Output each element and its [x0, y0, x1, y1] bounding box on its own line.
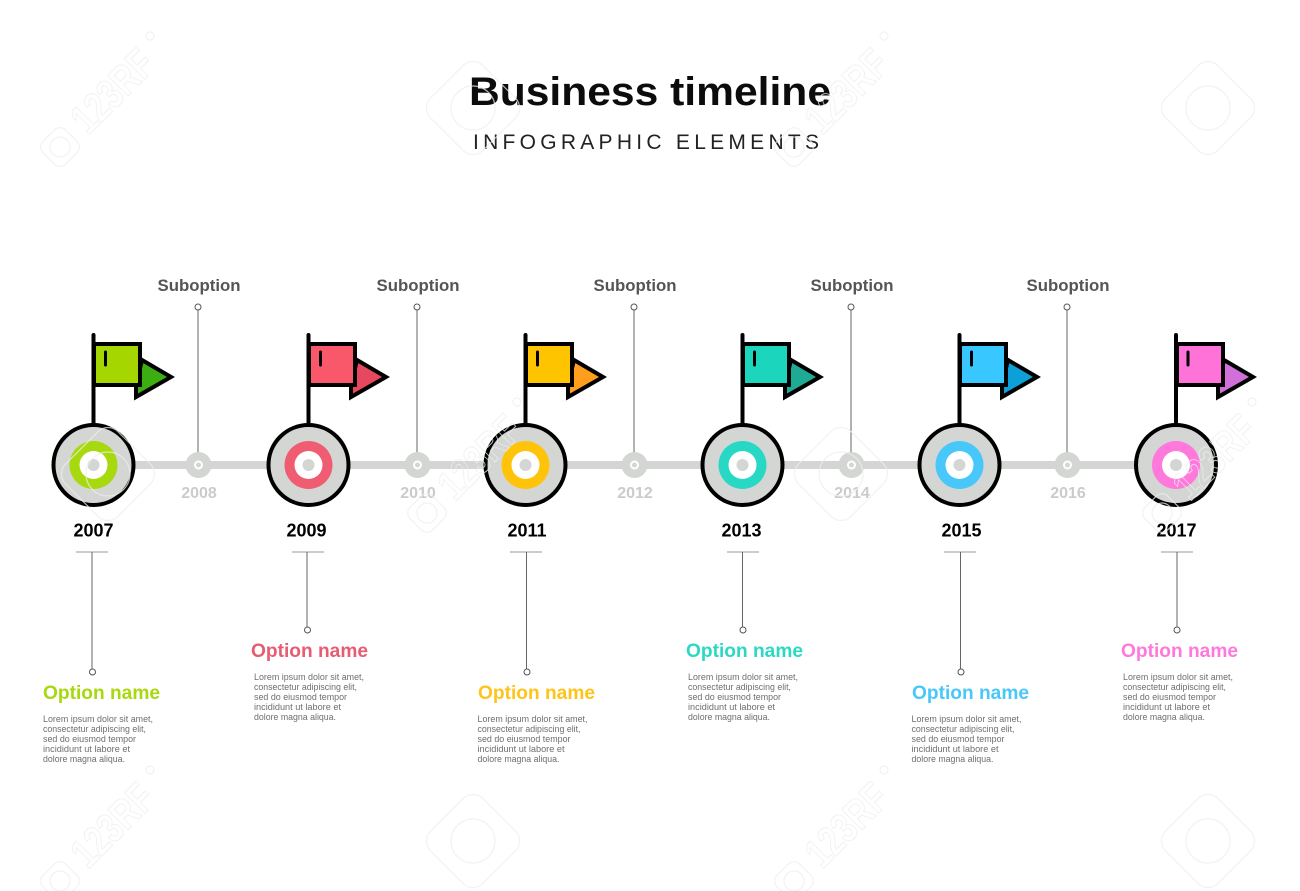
flag icon 2011: [526, 335, 603, 424]
watermark logo bottom left: [37, 766, 164, 891]
option text 2011: consectetur adipiscing elit,: [478, 724, 580, 734]
option text 2017: Option name: [1121, 641, 1238, 662]
suboption 2014: [810, 276, 894, 502]
option text 2013: consectetur adipiscing elit,: [688, 682, 791, 692]
year 2017: 2017: [1156, 520, 1197, 540]
option text 2007: [43, 683, 160, 764]
option text 2007: Option name: [43, 683, 160, 704]
flag icon 2015: [960, 335, 1037, 424]
option text 2009: Option name: [251, 641, 368, 662]
connector 2015: [944, 552, 976, 675]
milestone 2017: [1121, 335, 1253, 722]
option text 2009: Lorem ipsum dolor sit amet,: [254, 672, 364, 682]
suboption 2010: Suboption: [376, 276, 460, 295]
year 2011: 2011: [507, 520, 547, 540]
year 2013: 2013: [721, 520, 762, 540]
suboption 2008: [158, 276, 240, 502]
option text 2017: incididunt ut labore et: [1123, 702, 1211, 712]
suboption 2016: 2016: [1050, 485, 1086, 502]
timeline axis: [93, 461, 1176, 469]
target 2015: [920, 425, 1000, 505]
target 2009: [268, 425, 348, 505]
watermark logo middle centre: 123RF: [428, 406, 531, 508]
option text 2009: dolore magna aliqua.: [254, 712, 336, 722]
milestone 2009: [251, 335, 386, 722]
option text 2007: sed do eiusmod tempor: [43, 734, 136, 744]
watermark egg middle right-centre: [789, 422, 893, 526]
suboption 2010: [376, 276, 460, 502]
connector 2011: [510, 552, 542, 675]
option text 2011: [478, 683, 595, 764]
suboption 2012: [594, 276, 676, 502]
suboption 2016: Suboption: [1026, 276, 1110, 295]
option text 2013: [686, 641, 803, 722]
watermark egg middle left: [56, 422, 160, 526]
watermark logo top right-centre: 123RF: [795, 40, 898, 142]
connector 2013: [727, 552, 759, 633]
suboption 2012: 2012: [617, 485, 653, 502]
suboption 2012: Suboption: [594, 276, 676, 295]
watermark logo bottom right-centre: [771, 766, 898, 891]
year 2007: 2007: [73, 520, 114, 540]
watermark logo middle centre: [404, 398, 531, 536]
watermark logo top left: [37, 32, 164, 170]
suboption 2008: 2008: [181, 485, 217, 502]
milestone 2007: [43, 335, 171, 764]
option text 2009: incididunt ut labore et: [254, 702, 342, 712]
title: Business timeline: [469, 70, 831, 114]
target 2011: [486, 425, 566, 505]
watermark egg bottom centre: [421, 789, 525, 891]
option text 2017: [1121, 641, 1238, 722]
option text 2015: dolore magna aliqua.: [912, 754, 994, 764]
suboption 2010: 2010: [400, 485, 436, 502]
flag icon 2017: [1176, 335, 1253, 424]
option text 2013: incididunt ut labore et: [688, 702, 776, 712]
option text 2007: incididunt ut labore et: [43, 744, 131, 754]
milestone 2013: [686, 335, 820, 722]
suboption 2014: Suboption: [810, 276, 894, 295]
option text 2017: Lorem ipsum dolor sit amet,: [1123, 672, 1233, 682]
option text 2007: Lorem ipsum dolor sit amet,: [43, 714, 153, 724]
option text 2011: incididunt ut labore et: [478, 744, 565, 754]
year 2015: 2015: [941, 520, 982, 540]
target 2013: [702, 425, 782, 505]
milestone 2015: [912, 335, 1037, 764]
suboption 2008: Suboption: [158, 276, 240, 295]
option text 2017: dolore magna aliqua.: [1123, 712, 1205, 722]
option text 2013: dolore magna aliqua.: [688, 712, 770, 722]
watermark logo middle right: [1139, 398, 1266, 536]
connector 2007: [76, 552, 108, 675]
watermark egg bottom right: [1156, 789, 1260, 891]
option text 2015: Lorem ipsum dolor sit amet,: [912, 714, 1022, 724]
connector 2017: [1161, 552, 1193, 633]
option text 2013: Lorem ipsum dolor sit amet,: [688, 672, 798, 682]
target 2007: [54, 425, 134, 505]
flag icon 2007: [94, 335, 171, 424]
option text 2013: sed do eiusmod tempor: [688, 692, 781, 702]
suboption 2016: [1026, 276, 1110, 502]
option text 2015: consectetur adipiscing elit,: [912, 724, 1014, 734]
option text 2017: sed do eiusmod tempor: [1123, 692, 1216, 702]
option text 2011: Option name: [478, 683, 595, 704]
option text 2017: consectetur adipiscing elit,: [1123, 682, 1226, 692]
connector 2009: [292, 552, 324, 633]
watermark logo top right-centre: [771, 32, 898, 170]
option text 2015: [912, 683, 1029, 764]
watermark logo top left: 123RF: [61, 40, 164, 142]
option text 2013: Option name: [686, 641, 803, 662]
option text 2011: dolore magna aliqua.: [478, 754, 560, 764]
watermark logo middle right: 123RF: [1163, 406, 1266, 508]
option text 2009: consectetur adipiscing elit,: [254, 682, 357, 692]
watermark egg top centre: [421, 56, 525, 160]
option text 2015: Option name: [912, 683, 1029, 704]
option text 2009: sed do eiusmod tempor: [254, 692, 347, 702]
option text 2015: incididunt ut labore et: [912, 744, 999, 754]
watermark egg top right: [1156, 56, 1260, 160]
milestone 2011: [478, 335, 603, 764]
year 2009: 2009: [286, 520, 327, 540]
option text 2009: [251, 641, 368, 722]
flag icon 2013: [742, 335, 820, 424]
suboption 2014: 2014: [834, 485, 870, 502]
option text 2011: Lorem ipsum dolor sit amet,: [478, 714, 588, 724]
flag icon 2009: [308, 335, 386, 424]
option text 2015: sed do eiusmod tempor: [912, 734, 1004, 744]
watermark logo bottom right-centre: 123RF: [795, 774, 898, 876]
option text 2007: dolore magna aliqua.: [43, 754, 125, 764]
target 2017: [1136, 425, 1216, 505]
watermark logo bottom left: 123RF: [61, 774, 164, 876]
option text 2007: consectetur adipiscing elit,: [43, 724, 146, 734]
option text 2011: sed do eiusmod tempor: [478, 734, 570, 744]
subtitle: INFOGRAPHIC ELEMENTS: [473, 131, 819, 154]
